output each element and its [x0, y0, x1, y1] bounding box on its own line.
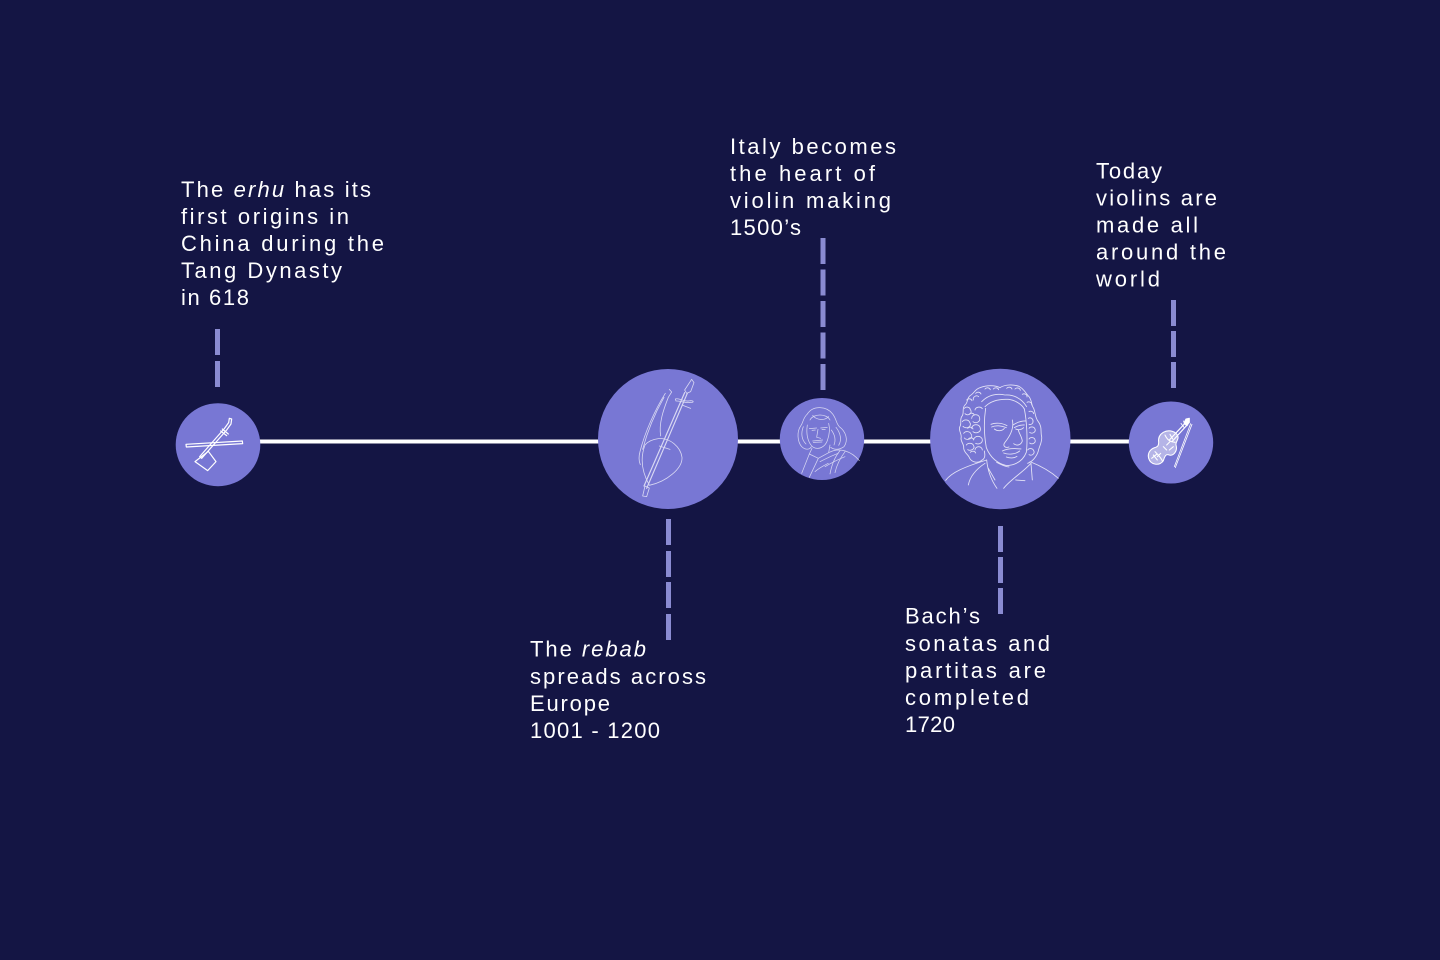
text: rebab spreads: spreads across [530, 664, 706, 689]
text: Bach sonatas: 1720 [905, 712, 955, 737]
circle: Italian portrait [780, 398, 864, 480]
text: Italy violin making: Italy becomes [730, 134, 896, 159]
text: Italy violin making: the heart of [730, 161, 876, 186]
text: rebab spreads: The rebab [530, 636, 646, 662]
icon: erhu [186, 418, 243, 471]
milestone: Italy [730, 134, 896, 480]
text: violins today [1095, 158, 1226, 292]
text: Italy violin making [730, 134, 896, 240]
text: Bach sonatas: partitas are [905, 658, 1046, 683]
text: erhu origins: The erhu has its [181, 177, 371, 202]
icon: rebab [639, 379, 694, 497]
text: violins today: violins are [1096, 186, 1217, 210]
text: rebab spreads: Europe [530, 691, 610, 716]
text: violins today: Today [1096, 158, 1162, 184]
dashed connector: Italy [820, 238, 826, 390]
milestone: today [1095, 158, 1226, 484]
dashed connector: today [1171, 300, 1176, 388]
text: violins today: world [1095, 266, 1160, 292]
text: erhu origins: in 618 [181, 285, 249, 310]
circle: rebab [598, 369, 738, 509]
circle: erhu [176, 403, 260, 486]
milestone: Bach [905, 369, 1070, 737]
text: violins today: around the [1096, 240, 1226, 264]
dashed connector: erhu [215, 329, 220, 387]
dashed connector: Bach [998, 526, 1003, 614]
circle: violin [1129, 402, 1213, 484]
dashed connector: rebab [666, 519, 671, 640]
text: Bach sonatas [905, 604, 1050, 737]
icon: Italian portrait [798, 408, 859, 477]
timeline line [255, 440, 1135, 444]
text: erhu origins [181, 177, 384, 310]
milestone: erhu [176, 177, 384, 486]
text: erhu origins: China during the [181, 231, 384, 256]
text: Italy violin making: violin making [730, 188, 891, 213]
milestone: rebab [530, 369, 738, 743]
text: violins today: made all [1096, 212, 1198, 238]
text: rebab spreads [530, 636, 706, 743]
icon: Bach portrait [946, 385, 1058, 488]
text: Italy violin making: 1500’s [730, 215, 801, 240]
icon: violin [1148, 418, 1192, 468]
text: Bach sonatas: Bach’s [905, 604, 980, 628]
text: Bach sonatas: completed [905, 685, 1029, 710]
text: Bach sonatas: sonatas and [905, 631, 1050, 656]
text: erhu origins: first origins in [181, 204, 349, 229]
text: erhu origins: Tang Dynasty [181, 258, 342, 283]
text: rebab spreads: 1001 - 1200 [530, 718, 660, 743]
circle: Bach portrait [930, 369, 1070, 509]
